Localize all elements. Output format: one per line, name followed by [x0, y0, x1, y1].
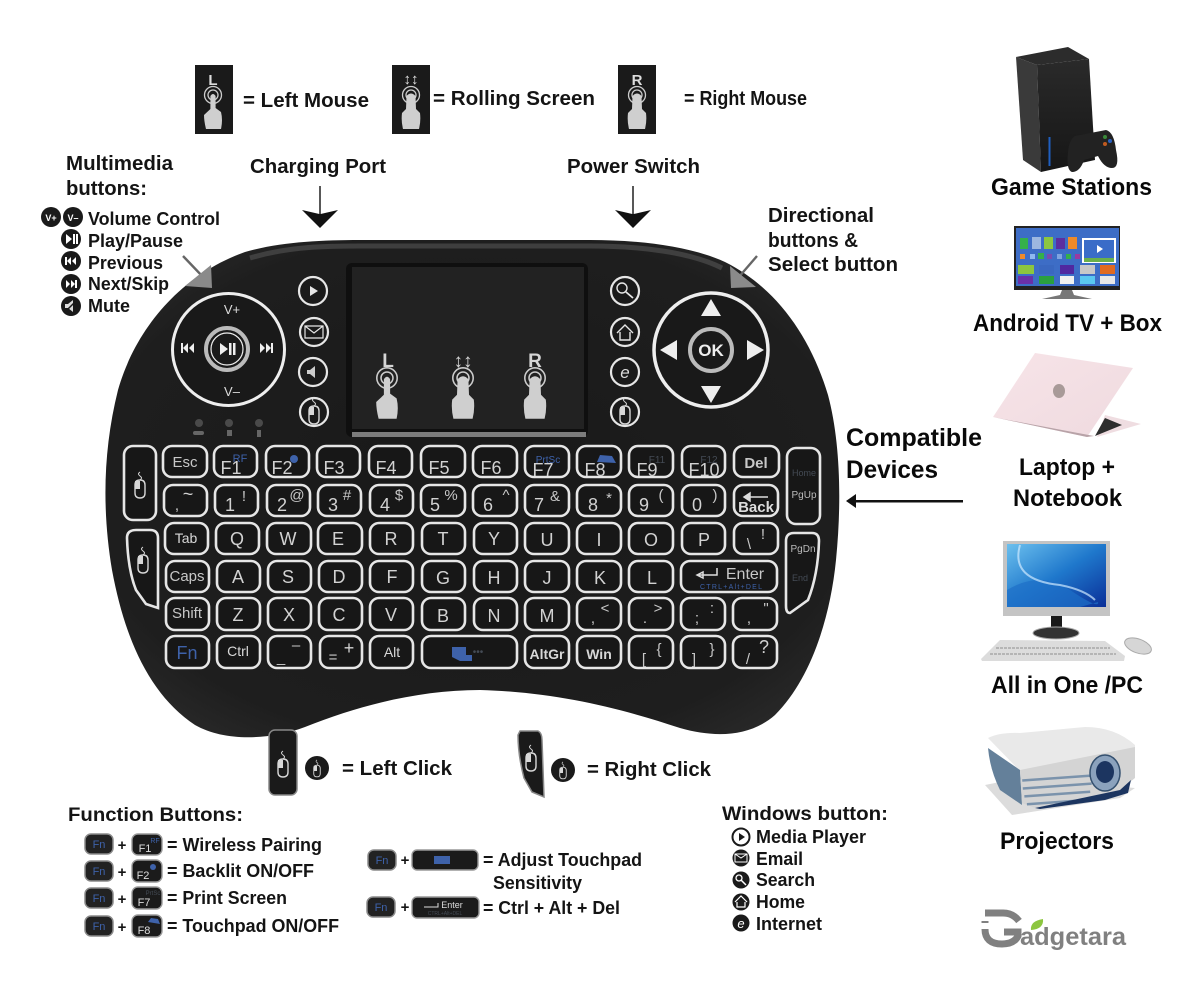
combo: touchpad sensitivity: = Adjust Touchpad: [483, 850, 642, 870]
key row: bottom modifiers: /: [746, 651, 751, 668]
key row: function keys: F8: [584, 460, 606, 480]
icon: volume up: [41, 207, 61, 227]
device: projector: [985, 727, 1135, 815]
side key: left click upper: [124, 446, 156, 520]
key row: numbers: 5: [430, 495, 440, 515]
label: game stations: Game Stations: [991, 174, 1152, 201]
combo: ctrl alt del: Enter: [441, 900, 463, 910]
label: laptop notebook: Notebook: [1013, 485, 1123, 512]
key row: numbers: %: [444, 487, 458, 504]
list: function button combos right: [367, 850, 642, 918]
combo: wireless pairing: RF: [150, 838, 160, 845]
key row: numbers: 1: [225, 495, 235, 515]
key row: ASDF: D: [332, 567, 346, 587]
touchpad: [346, 263, 588, 437]
icon: rolling screen gesture: ↕↕: [404, 71, 418, 88]
legend: right click: [518, 731, 712, 797]
key row: numbers: $: [395, 487, 404, 504]
label: mute: Mute: [88, 296, 130, 316]
multimedia dial: V+: [224, 302, 240, 317]
combo: print screen: [85, 887, 287, 909]
key row: ASDF: H: [488, 568, 500, 588]
key row: QWERTY: W: [280, 529, 296, 549]
label: right click: = Right Click: [587, 759, 712, 781]
label: power switch: Power Switch: [567, 156, 700, 178]
icon: left mouse gesture: [195, 65, 233, 134]
key row: bottom modifiers: [: [642, 651, 647, 668]
label: all in one pc: All in One /PC: [991, 672, 1143, 699]
key row: numbers: 4: [380, 495, 390, 515]
combo: wireless pairing: [85, 834, 322, 855]
key row: ASDF: Caps: [169, 568, 205, 585]
keyboard body: [105, 240, 839, 737]
arrow: directional pointer: [730, 256, 757, 288]
combo: touchpad sensitivity: Sensitivity: [493, 873, 582, 893]
key row: bottom modifiers: _: [276, 649, 286, 666]
icon: rolling screen gesture: [392, 65, 430, 134]
key row: QWERTY: E: [332, 529, 344, 549]
key row: numbers: ,: [175, 497, 179, 514]
key row: ASDF: [166, 561, 777, 592]
side key: page up: PgUp: [791, 490, 817, 501]
combo: wireless pairing: F1: [139, 843, 151, 855]
key row: numbers: ^: [502, 487, 510, 504]
key row: bottom modifiers: Ctrl: [227, 643, 249, 659]
directional pad: [654, 293, 768, 407]
key row: numbers: ): [712, 487, 718, 504]
combo: wireless pairing: = Wireless Pairing: [167, 835, 322, 855]
key row: ZXCV: ,: [747, 610, 751, 627]
side key: page down: [786, 533, 819, 613]
key row: bottom modifiers: ?: [759, 637, 769, 657]
key row: ZXCV: C: [332, 605, 346, 625]
device: game console: [1016, 47, 1117, 172]
label: rolling screen: = Rolling Screen: [433, 88, 595, 110]
icon: mute: [61, 296, 81, 316]
key row: QWERTY: I: [596, 530, 602, 550]
combo: backlit: +: [118, 864, 127, 881]
key row: bottom modifiers: •••: [473, 647, 484, 658]
label: right mouse: = Right Mouse: [684, 88, 807, 110]
key row: QWERTY: [165, 523, 778, 554]
touchpad gesture: scroll: [452, 351, 474, 419]
touchpad gesture: scroll: ↕↕: [454, 351, 472, 372]
combo: wireless pairing: +: [118, 837, 127, 854]
heading: multimedia buttons: buttons:: [66, 178, 147, 200]
combo: ctrl alt del: +: [401, 899, 410, 916]
key row: ZXCV: >: [654, 600, 663, 617]
label: play pause: Play/Pause: [88, 231, 183, 251]
key row: numbers: 2: [277, 495, 287, 515]
key row: QWERTY: Y: [488, 529, 500, 549]
icon: volume down: [63, 207, 83, 227]
combo: touchpad toggle: Fn: [93, 921, 105, 933]
legend: touchpad gestures: [195, 65, 807, 134]
multimedia dial: V–: [224, 384, 241, 399]
combo: print screen: +: [118, 891, 127, 908]
side key: page down: PgDn: [790, 544, 816, 555]
key row: numbers: Back: [738, 499, 775, 516]
combo: wireless pairing: Fn: [93, 839, 105, 851]
key row: numbers: 7: [534, 495, 544, 515]
touchpad gesture: left: [376, 351, 398, 419]
arrow: power switch: [615, 186, 651, 228]
logo wordmark: adgetara: [1020, 923, 1127, 951]
item: email: Email: [756, 849, 803, 869]
multimedia dial: [172, 294, 284, 406]
combo: ctrl alt del: CTRL+Alt+DEL: [428, 911, 462, 917]
key row: QWERTY: !: [761, 526, 765, 543]
key row: bottom modifiers: Alt: [384, 644, 400, 660]
combo: ctrl alt del: [367, 897, 620, 918]
combo: touchpad toggle: F8: [138, 925, 150, 937]
key row: function keys: Del: [744, 455, 768, 472]
key row: ZXCV: :: [710, 600, 714, 617]
directional pad: OK: [698, 341, 724, 360]
device: desktop pc: [981, 541, 1154, 661]
combo: touchpad sensitivity: +: [401, 852, 410, 869]
list: multimedia buttons: [41, 207, 220, 316]
key row: function keys: F1: [220, 458, 242, 478]
combo: print screen: Fn: [93, 893, 105, 905]
label: android tv: Android TV + Box: [973, 310, 1163, 337]
right side icon buttons: e: [620, 363, 630, 382]
arrow: multimedia pointer: [183, 256, 212, 288]
heading: function buttons: Function Buttons:: [68, 805, 243, 826]
key row: function keys: F4: [375, 458, 397, 478]
icon: right mouse gesture: R: [632, 72, 643, 89]
combo: touchpad sensitivity: [368, 850, 642, 893]
key row: function keys: F12: [700, 455, 718, 466]
key row: ZXCV: ": [763, 600, 769, 617]
key row: ZXCV: V: [385, 605, 397, 625]
key row: function keys: F10: [688, 460, 720, 480]
key row: ASDF: G: [436, 568, 450, 588]
key row: function keys: F9: [636, 460, 658, 480]
label: charging port: Charging Port: [250, 156, 386, 178]
key row: function keys: F5: [428, 458, 450, 478]
key row: numbers: 3: [328, 495, 338, 515]
label: projectors: Projectors: [1000, 828, 1114, 855]
item: internet: e: [737, 916, 745, 931]
label: left mouse: = Left Mouse: [243, 90, 369, 112]
list: function button combos left: [85, 834, 339, 937]
icon: volume down: V–: [67, 213, 79, 223]
right side icon buttons: [611, 277, 639, 426]
heading: windows button: Windows button:: [722, 804, 888, 825]
arrow: compatible devices: [846, 494, 963, 508]
key row: bottom modifiers: }: [709, 641, 715, 658]
key row: ZXCV: [166, 598, 777, 630]
key row: ZXCV: M: [540, 606, 554, 626]
key row: ZXCV: ,: [591, 610, 595, 627]
key row: numbers: 6: [483, 495, 493, 515]
logo leaf: [1031, 919, 1043, 930]
label: previous: Previous: [88, 253, 163, 273]
key row: bottom modifiers: =: [329, 649, 338, 666]
icon: play pause: [61, 229, 81, 249]
combo: backlit: Fn: [93, 866, 105, 878]
side key: page up: Home: [792, 468, 816, 478]
key row: QWERTY: Tab: [175, 530, 197, 546]
key row: ASDF: S: [282, 567, 294, 587]
combo: ctrl alt del: Fn: [375, 902, 387, 914]
legend: left click: [269, 730, 453, 795]
key row: ZXCV: X: [283, 605, 295, 625]
item: media player: Media Player: [756, 827, 866, 847]
key row: function keys: PrtSc: [536, 455, 560, 466]
device: android tv: [1014, 226, 1120, 299]
key row: bottom modifiers: +: [344, 638, 354, 658]
key row: function keys: Esc: [172, 454, 198, 471]
key row: bottom modifiers: AltGr: [530, 646, 565, 662]
icon: next: [61, 274, 81, 294]
icon: game controller: [1068, 130, 1117, 172]
key row: bottom modifiers: ]: [692, 651, 696, 668]
combo: touchpad toggle: +: [118, 919, 127, 936]
key row: numbers: #: [343, 487, 352, 504]
label: next skip: Next/Skip: [88, 274, 169, 294]
heading: compatible devices: Devices: [846, 456, 938, 484]
key row: ZXCV: Shift: [172, 605, 203, 622]
key row: numbers: 9: [639, 495, 649, 515]
combo: backlit: = Backlit ON/OFF: [167, 861, 314, 881]
key row: function keys: F7: [532, 460, 554, 480]
key row: bottom modifiers: Fn: [176, 643, 198, 663]
combo: backlit: [85, 860, 314, 882]
key row: ASDF: CTRL+Alt+DEL: [700, 584, 762, 591]
combo: print screen: = Print Screen: [167, 888, 287, 908]
key row: function keys: RF: [233, 453, 248, 465]
icon: right mouse gesture: [618, 65, 656, 134]
key row: QWERTY: P: [698, 530, 710, 550]
icon: left mouse gesture: L: [208, 72, 218, 89]
key row: ASDF: L: [647, 568, 657, 588]
heading: multimedia buttons: Multimedia: [66, 153, 174, 175]
label: directional buttons: Directional: [768, 205, 874, 227]
key row: QWERTY: T: [438, 529, 448, 549]
label: directional buttons: buttons &: [768, 230, 858, 252]
item: search: Search: [756, 870, 815, 890]
icon: previous: [61, 251, 81, 271]
item: internet: Internet: [756, 914, 822, 934]
key row: ASDF: J: [542, 568, 552, 588]
key row: ZXCV: <: [601, 600, 610, 617]
heading: compatible devices: Compatible: [846, 424, 982, 452]
key row: ASDF: F: [386, 567, 398, 587]
combo: print screen: PrtSc: [146, 891, 160, 897]
key row: function keys: F2: [271, 458, 293, 478]
touchpad gesture: right: R: [528, 351, 542, 372]
key row: numbers: 0: [692, 495, 702, 515]
label: directional buttons: Select button: [768, 254, 898, 276]
key row: function keys: F3: [323, 458, 345, 478]
combo: backlit: F2: [137, 870, 149, 882]
key row: function keys: F6: [480, 458, 502, 478]
key row: QWERTY: U: [540, 530, 554, 550]
side key: left click lower: [127, 530, 158, 608]
key row: numbers: !: [242, 488, 246, 505]
key row: bottom modifiers: Win: [586, 646, 612, 662]
combo: ctrl alt del: = Ctrl + Alt + Del: [483, 898, 620, 918]
status LEDs: [193, 419, 263, 437]
key row: QWERTY: \: [747, 536, 752, 553]
key row: numbers: 8: [588, 495, 598, 515]
list: windows buttons: [732, 827, 866, 934]
side key: page down: End: [792, 573, 808, 583]
key row: QWERTY: O: [644, 530, 658, 550]
key row: numbers: &: [550, 488, 560, 505]
key row: function keys: [163, 446, 779, 480]
combo: touchpad toggle: [85, 915, 339, 937]
key row: ZXCV: ;: [695, 610, 699, 627]
side key: page up: [787, 448, 820, 524]
left side icon buttons: [299, 277, 328, 426]
key row: ZXCV: B: [437, 606, 449, 626]
icon: volume up: V+: [45, 213, 57, 223]
key row: QWERTY: Q: [230, 529, 244, 549]
key row: ASDF: Enter: [726, 566, 765, 583]
key row: ZXCV: Z: [232, 605, 244, 625]
key row: numbers: ~: [183, 484, 193, 504]
label: laptop notebook: Laptop +: [1019, 454, 1115, 481]
label: volume control: Volume Control: [88, 209, 220, 229]
key row: numbers: *: [606, 490, 612, 507]
combo: print screen: F7: [138, 897, 150, 909]
label: left click: = Left Click: [342, 758, 453, 780]
key row: numbers: @: [289, 487, 305, 504]
key row: function keys: F11: [649, 455, 666, 466]
key row: numbers: (: [658, 487, 664, 504]
logo mark: G: [985, 913, 1019, 944]
item: home: Home: [756, 892, 805, 912]
key row: bottom modifiers: –: [292, 637, 301, 654]
key row: numbers: [164, 484, 778, 516]
device: laptop: [993, 353, 1141, 437]
combo: touchpad toggle: = Touchpad ON/OFF: [167, 916, 339, 936]
touchpad gesture: left: L: [382, 351, 394, 372]
key row: ZXCV: N: [488, 606, 500, 626]
key row: ZXCV: .: [643, 610, 647, 627]
combo: touchpad sensitivity: Fn: [376, 855, 388, 867]
logo: Gadgetara: [985, 913, 1127, 951]
arrow: charging port: [302, 186, 338, 228]
key row: ASDF: A: [232, 567, 244, 587]
key row: bottom modifiers: {: [656, 641, 662, 658]
touchpad gesture: right: [524, 351, 546, 419]
key row: QWERTY: R: [384, 529, 398, 549]
key row: bottom modifiers: [166, 636, 777, 668]
key row: ASDF: K: [594, 568, 606, 588]
